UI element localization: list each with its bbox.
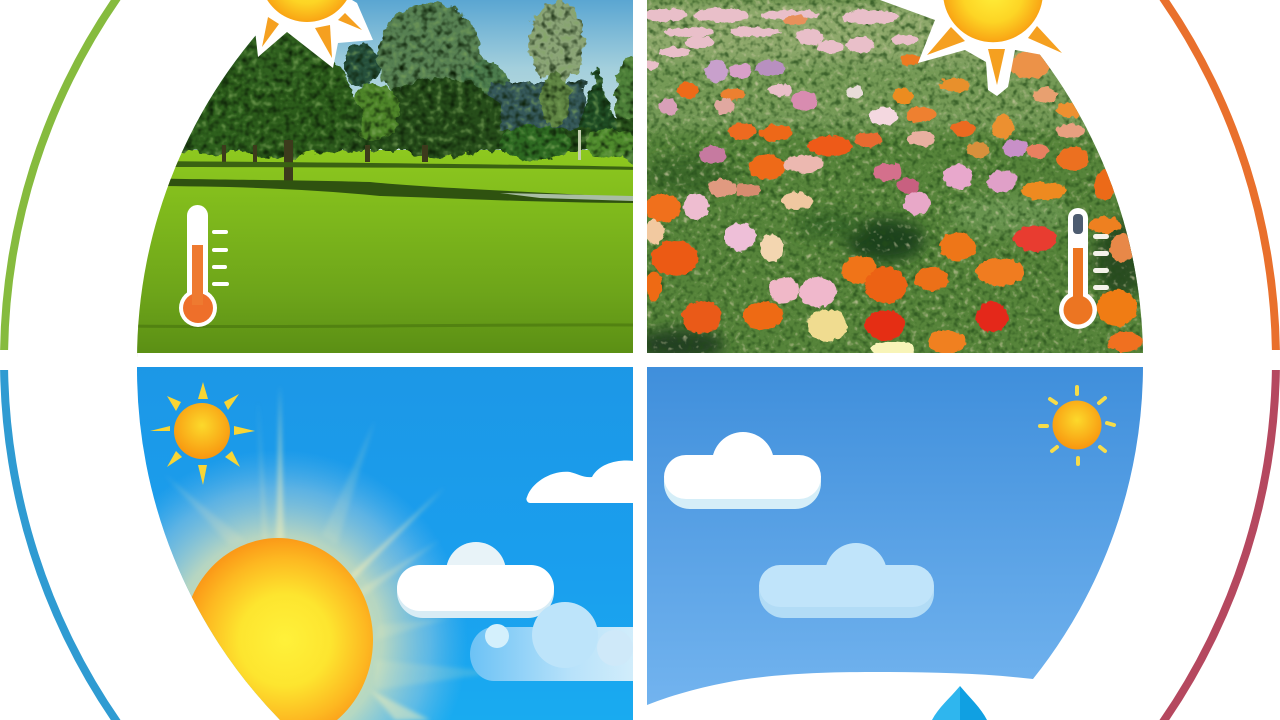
big sun (183, 538, 373, 720)
thermometer: medium level (179, 205, 229, 327)
lawn (130, 150, 640, 357)
flower field speckle (640, 0, 1150, 360)
panel: green park landscape (130, 0, 644, 357)
cloud: blue lower right (470, 602, 640, 681)
cloud: white middle (397, 542, 554, 618)
cloud: top right (526, 461, 640, 503)
icon: small sun (150, 382, 255, 485)
foliage patches (635, 0, 1150, 361)
icon: sun on park panel (255, 0, 373, 68)
outer ring: bottom-left blue arc (0, 370, 121, 720)
outer ring: top-left green arc (0, 0, 121, 350)
thermometer: high level (1059, 208, 1109, 329)
panel: spring flower field (635, 0, 1150, 361)
outer ring: top-right orange arc (1160, 0, 1280, 350)
icon: sun on flower panel (880, 0, 1070, 96)
panel: pale blue sky (640, 360, 1150, 710)
panel: summer sky with big sun (130, 360, 640, 720)
cloud: light blue (759, 543, 934, 618)
outer ring: bottom-right maroon arc (1160, 370, 1280, 720)
sun glow and rays (156, 394, 480, 720)
icon: small sun (1040, 387, 1114, 464)
icon: water drop (932, 686, 987, 720)
tree shadows (176, 161, 633, 170)
tree line (160, 2, 644, 165)
cloud: white (664, 432, 821, 509)
tree trunks (222, 130, 581, 182)
flowers (642, 8, 1143, 357)
